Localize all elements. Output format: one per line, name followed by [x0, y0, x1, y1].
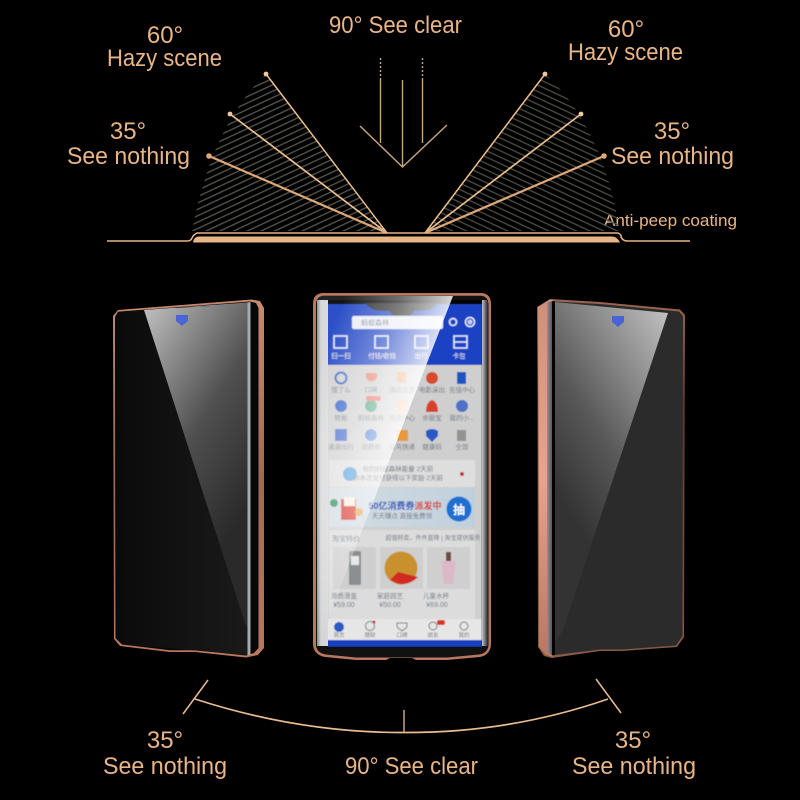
label: bottom right 35 degree see nothing: See nothing	[572, 753, 696, 780]
app blue header	[322, 304, 482, 366]
notice text: 你的蚂蚁森林能量 2天前	[363, 464, 434, 473]
left phone notch	[172, 306, 212, 308]
app grid labels: 消费券	[361, 442, 381, 451]
app grid labels: 滴滴出行	[328, 442, 354, 451]
app grid labels: 转账	[334, 413, 348, 422]
label: right 35 degree see nothing	[611, 118, 734, 170]
center phone frame	[313, 293, 491, 660]
tab labels: 朋友	[427, 631, 439, 639]
header labels: 出行	[414, 351, 428, 360]
heading: 90 degree see clear top: 90° See clear	[329, 12, 462, 39]
label: bottom right 35 degree see nothing: 35°	[615, 727, 651, 754]
app grid labels: 健康码	[422, 442, 442, 451]
bottom tab bar	[322, 619, 482, 640]
notice text	[353, 464, 464, 482]
product names and prices: ¥69.00	[426, 602, 448, 609]
tab icons	[334, 620, 468, 632]
tab labels: 我的	[458, 631, 470, 639]
right phone side copper	[538, 300, 553, 657]
app grid labels: 充值中心	[389, 413, 416, 422]
label: left 60 degree hazy scene: Hazy scene	[107, 45, 222, 72]
notice card	[329, 460, 475, 487]
product card heading	[332, 534, 480, 543]
product names and prices: 儿童水杯	[423, 591, 450, 600]
product names and prices: ¥59.00	[333, 602, 355, 609]
blue strip	[322, 640, 482, 647]
tab labels	[334, 632, 470, 638]
app grid labels: 我的小...	[450, 413, 475, 422]
label: bottom 90 degree see clear: 90° See clear	[345, 753, 478, 780]
app grid labels: 全部	[456, 442, 469, 451]
glare on center screen	[317, 296, 453, 646]
left phone screen	[115, 302, 248, 655]
product names and prices: 家庭园艺	[377, 591, 404, 600]
center phone screen	[322, 303, 482, 647]
label: bottom left 35 degree see nothing: 35°	[147, 727, 183, 754]
app icon grid	[335, 372, 468, 442]
app grid labels: 饿了么	[331, 385, 351, 394]
header icons	[334, 318, 474, 348]
right phone side highlight	[547, 301, 552, 655]
diagram: left viewing fan	[192, 72, 387, 233]
label: bottom right 35 degree see nothing	[572, 727, 696, 780]
header labels	[331, 351, 466, 360]
phone: center, clear view	[313, 293, 491, 660]
diagram: right viewing fan	[425, 72, 620, 233]
diagram: bottom viewing arc	[183, 679, 621, 733]
product tiles	[333, 547, 470, 589]
search text: 蚂蚁森林	[361, 318, 389, 327]
product names and prices	[331, 592, 449, 608]
product: bottle	[441, 552, 456, 584]
phone: left, privacy view	[113, 300, 264, 658]
right phone camera icon	[612, 316, 624, 327]
app grey body	[328, 364, 482, 620]
tab labels: 理财	[364, 631, 376, 639]
promo button: 抽	[453, 501, 465, 518]
label: bottom left 35 degree see nothing	[103, 727, 227, 780]
product: melon	[384, 552, 418, 584]
product: phone	[349, 551, 361, 585]
promo heading: 50亿消费券派发中	[368, 500, 442, 511]
product card heading: 超值特卖，件件直降 | 淘宝提供服务	[386, 534, 480, 542]
label: left 35 degree see nothing: 35°	[110, 118, 146, 145]
label: right 60 degree hazy scene: Hazy scene	[568, 39, 683, 66]
promo banner	[329, 488, 475, 527]
app grid labels: 酒店出游	[389, 385, 416, 394]
label: right 60 degree hazy scene: 60°	[608, 16, 644, 43]
app grid labels	[328, 385, 476, 451]
notch	[364, 303, 436, 316]
promo button	[446, 496, 472, 522]
label: anti-peep coating: Anti-peep coating	[604, 211, 737, 230]
label: right 60 degree hazy scene	[568, 16, 683, 66]
promo illustration	[330, 497, 363, 520]
left phone camera icon	[176, 315, 188, 326]
icon: downward arrow 90 degrees	[360, 58, 447, 167]
tab labels: 口碑	[396, 631, 408, 639]
notice text: 你本次支付获得以下奖励 2天前	[353, 473, 443, 482]
right phone screen	[555, 302, 683, 655]
app grid labels: 电影演出	[419, 385, 445, 394]
app grid labels: 蚂蚁森林	[358, 413, 384, 422]
left phone side highlight	[248, 302, 250, 655]
product card	[329, 530, 475, 625]
label: left 35 degree see nothing	[67, 118, 190, 170]
header labels: 扫一扫	[331, 351, 351, 360]
center phone side bands	[317, 300, 488, 646]
header labels: 卡包	[452, 351, 466, 360]
notice icon	[343, 467, 357, 481]
product names and prices: ¥50.00	[379, 602, 401, 609]
app grid labels: 余额宝	[422, 413, 442, 422]
header labels: 付钱/收钱	[368, 351, 396, 360]
label: right 35 degree see nothing: 35°	[654, 118, 690, 145]
app grid labels: 充值中心	[449, 385, 476, 394]
right phone glare	[555, 302, 668, 642]
tab labels: 首页	[333, 631, 345, 639]
phone: right, privacy view	[537, 299, 685, 658]
diagram: glass base with coating	[107, 233, 690, 242]
label: bottom left 35 degree see nothing: See nothing	[103, 753, 227, 780]
label: left 60 degree hazy scene: 60°	[147, 22, 183, 49]
label: left 35 degree see nothing: See nothing	[67, 143, 190, 170]
product card heading: 淘宝特价	[332, 534, 360, 543]
app grid labels: 口碑	[364, 385, 378, 394]
promo subheading: 天天赚点 直接免费领	[372, 511, 433, 520]
label: right 35 degree see nothing: See nothing	[611, 143, 734, 170]
left phone glare	[144, 302, 248, 627]
product names and prices: 滑质滑盖	[331, 591, 358, 600]
label: left 60 degree hazy scene	[107, 22, 222, 72]
app grid labels: 菜鸟快递	[389, 442, 416, 451]
search bar	[352, 316, 443, 329]
